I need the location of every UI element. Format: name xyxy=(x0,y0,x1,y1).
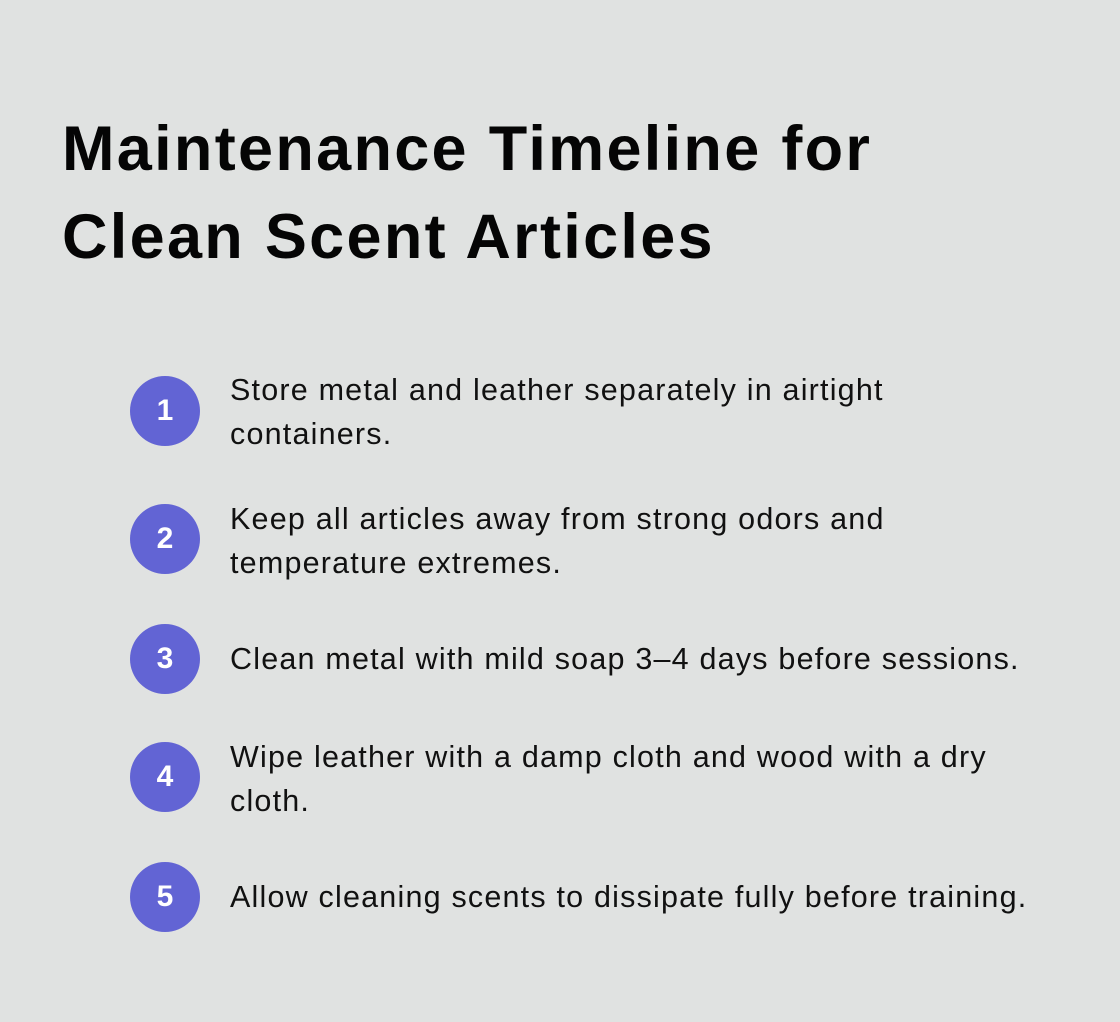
text 1: Store metal and leather separately in airtight xyxy=(230,373,884,407)
text 2 xyxy=(230,502,885,580)
text 4: Wipe leather with a damp cloth and wood with a dry xyxy=(230,740,987,774)
step 5 xyxy=(130,862,1027,932)
badge 4: 4 xyxy=(157,760,173,793)
text 3: Clean metal with mild soap 3–4 days before sessions. xyxy=(230,642,1020,676)
title: Maintenance Timeline for xyxy=(62,114,872,184)
badge 3: 3 xyxy=(157,642,173,675)
step 2 xyxy=(130,502,885,580)
title xyxy=(62,114,872,272)
step 1 xyxy=(130,373,884,451)
badge 2 xyxy=(130,504,200,574)
step 4 xyxy=(130,740,987,818)
badge 1 xyxy=(130,376,200,446)
badge 5 xyxy=(130,862,200,932)
text 2: Keep all articles away from strong odors and xyxy=(230,502,885,536)
text 4 xyxy=(230,740,987,818)
text 4: cloth. xyxy=(230,784,310,818)
badge 3 xyxy=(130,624,200,694)
title: Clean Scent Articles xyxy=(62,202,715,272)
step 3 xyxy=(130,624,1020,694)
text 2: temperature extremes. xyxy=(230,546,562,580)
badge 2: 2 xyxy=(157,522,173,555)
text 5: Allow cleaning scents to dissipate fully before training. xyxy=(230,880,1027,914)
text 1 xyxy=(230,373,884,451)
badge 1: 1 xyxy=(157,394,173,427)
text 1: containers. xyxy=(230,417,392,451)
badge 4 xyxy=(130,742,200,812)
badge 5: 5 xyxy=(157,880,173,913)
